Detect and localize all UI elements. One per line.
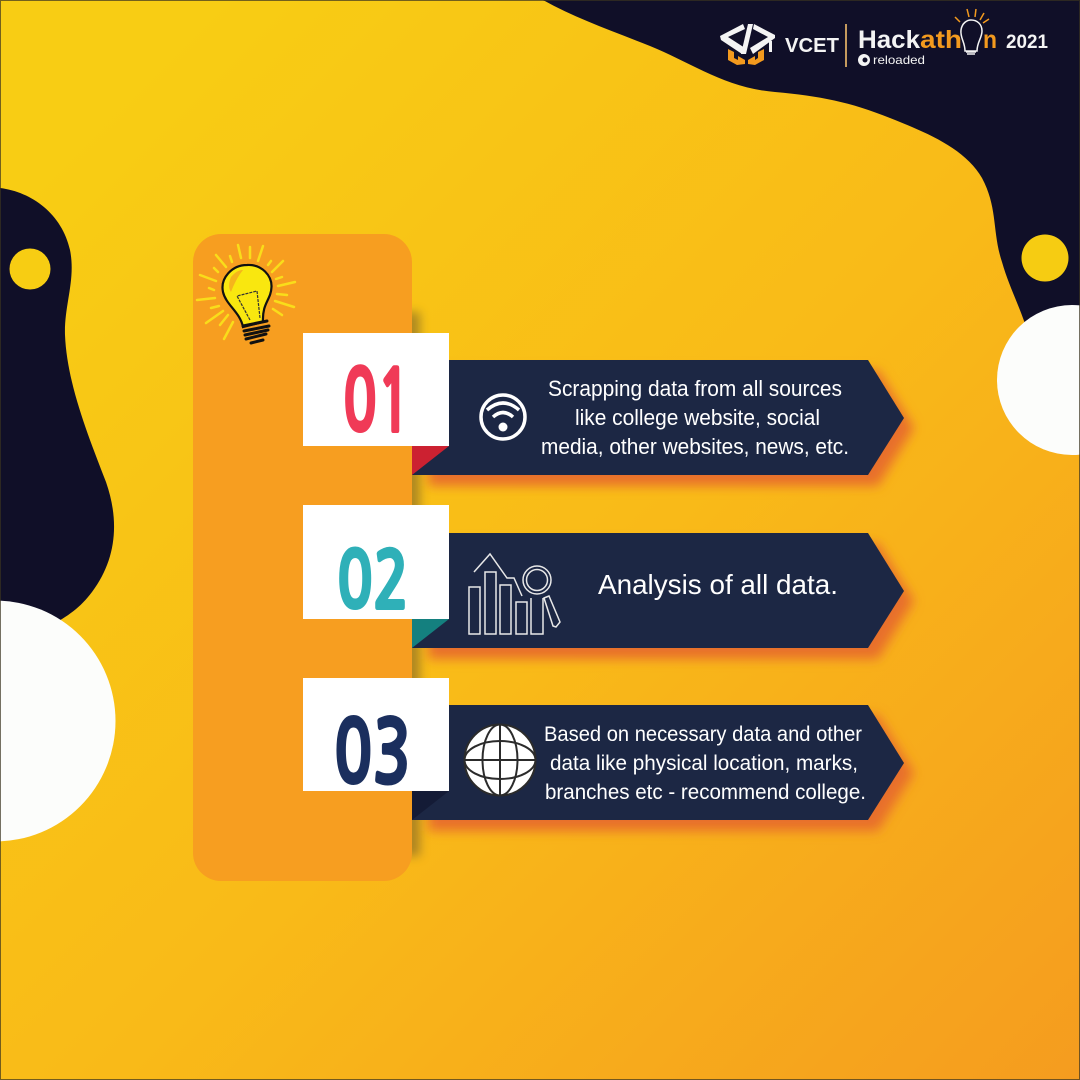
- number 03: 03: [334, 710, 411, 796]
- icon: logo bulb: [955, 9, 989, 54]
- bulb screw base: [243, 321, 269, 343]
- step 1: [303, 333, 914, 486]
- fold 1: [412, 446, 449, 475]
- icon: reloaded mark: [858, 54, 870, 66]
- number 02: 02: [337, 542, 409, 620]
- text: Hackathon: Hack: [858, 26, 920, 54]
- fold 3: [412, 791, 449, 820]
- text: step 1: [541, 376, 849, 459]
- step 3: [303, 678, 914, 831]
- icon: VCET cap logo: [720, 24, 775, 65]
- text: step 3: Based on necessary data and other: [544, 722, 862, 746]
- text: n: n: [983, 26, 997, 54]
- ribbon shadow 3: [428, 715, 914, 831]
- text: step 2: Analysis of all data.: [598, 569, 838, 600]
- text: ath: ath: [920, 26, 962, 54]
- text: step 3: [544, 722, 866, 804]
- ribbon 1: [412, 360, 904, 475]
- text: 2021: 2021: [1006, 32, 1048, 53]
- number 01: 01: [343, 360, 411, 444]
- bulb filament: [237, 291, 260, 320]
- ribbon 3: [412, 705, 904, 820]
- icon: globe: [464, 724, 536, 796]
- step 2: [303, 505, 914, 659]
- text: step 3: branches etc - recommend college.: [545, 780, 866, 804]
- card 1: [303, 333, 449, 446]
- text: step 1: Scrapping data from all sources: [548, 376, 842, 401]
- text: VCET: VCET: [785, 34, 839, 57]
- bulb highlight: [229, 270, 243, 292]
- card 3: [303, 678, 449, 791]
- panel shadow: [402, 312, 420, 856]
- text: reloaded: reloaded: [873, 53, 925, 67]
- text: step 1: media, other websites, news, etc.: [541, 434, 849, 459]
- dark blob: top right: [543, 0, 1080, 340]
- text: step 3: data like physical location, marks,: [550, 751, 858, 775]
- bulb glass: [223, 265, 272, 327]
- ribbon 2: [412, 533, 904, 648]
- icon: chart with magnifier: [469, 554, 560, 634]
- bulb rays: [197, 245, 295, 339]
- circle: left yellow: [10, 248, 50, 290]
- divider: [845, 24, 847, 67]
- logo: VCET Hackathon 2021: [720, 9, 1048, 67]
- card 2: [303, 505, 449, 619]
- ribbon shadow 2: [428, 543, 914, 659]
- circle: right white: [997, 305, 1080, 455]
- circle: left white: [0, 600, 116, 842]
- icon: light bulb: [197, 245, 295, 343]
- dark blob: left: [0, 188, 114, 640]
- text: step 1: like college website, social: [575, 405, 820, 430]
- ribbon shadow 1: [428, 370, 914, 486]
- icon: wifi: [481, 395, 525, 439]
- fold 2: [412, 619, 449, 648]
- circle: right yellow: [1022, 234, 1068, 282]
- panel: orange column: [193, 234, 412, 881]
